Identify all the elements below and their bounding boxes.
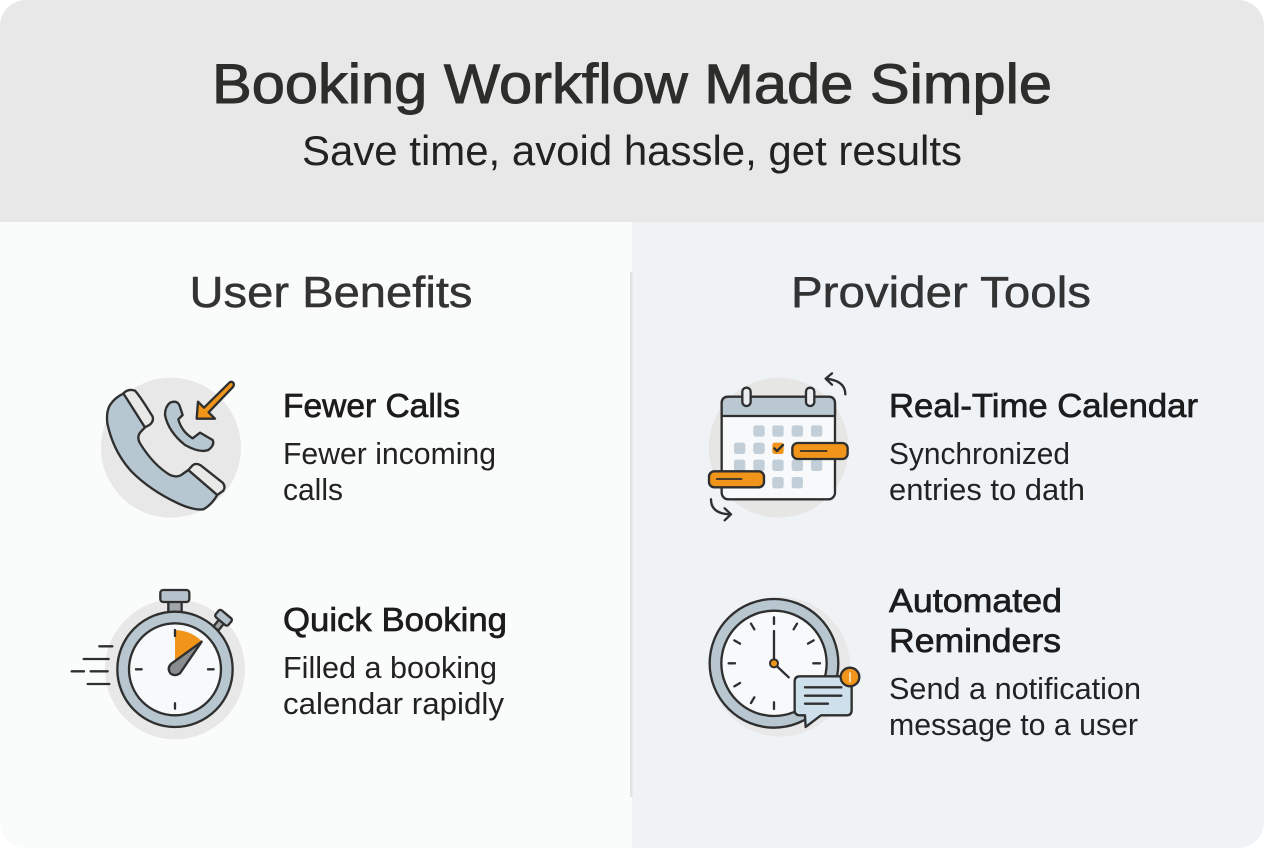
item description: entries to dath [889,472,1085,507]
item heading: Reminders [889,622,1061,659]
item heading: Real-Time Calendar [889,387,1198,424]
item description: Filled a booking [283,650,497,685]
item heading: Automated [889,582,1062,619]
icon: stopwatch [72,590,245,739]
item description: message to a user [889,707,1138,742]
label: quick booking [283,601,507,721]
subtitle: Save time, avoid hassle, get results [302,127,962,174]
panel: provider tools [632,222,1264,848]
item heading: Quick Booking [283,601,507,638]
icon: clock with message [710,597,859,737]
item heading: Fewer Calls [283,387,460,424]
title: Booking Workflow Made Simple [212,52,1052,115]
item description: Synchronized [889,436,1070,471]
item description: Send a notification [889,671,1141,706]
header band [0,0,1264,222]
label: automated reminders [889,582,1141,742]
icon: calendar [709,373,849,520]
label: fewer calls [283,387,496,507]
item description: Fewer incoming [283,436,496,471]
item description: calendar rapidly [283,686,504,721]
icon: phone with incoming arrow [101,378,241,518]
item description: calls [283,472,343,507]
panel: user benefits [0,222,632,848]
heading: provider tools: Provider Tools [791,268,1091,317]
heading: user benefits: User Benefits [190,268,472,317]
label: real-time calendar [889,387,1198,507]
